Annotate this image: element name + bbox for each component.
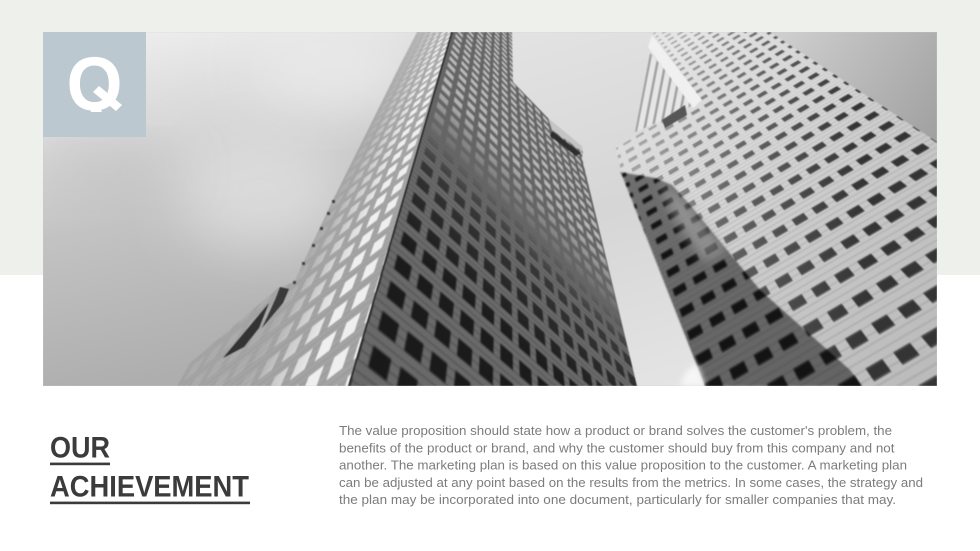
icon box: letter Q [43,32,146,137]
left tower: shaded face [348,32,638,386]
icon box: letter Q: Q [66,42,122,127]
right tower: sunlit face [616,32,937,386]
title: our achievement: ACHIEVEMENT [50,470,249,504]
title: our achievement: OUR [50,432,110,464]
body text paragraph: can be adjusted at any point based on the results from the metrics. In some cases, the strategy and [339,475,923,490]
body text paragraph: The value proposition should state how a product or brand solves the customer's problem, the [339,423,892,438]
body text paragraph: the plan may be incorporated into one document, particularly for smaller companies that may. [339,492,896,507]
body text paragraph: benefits of the product or brand, and why the customer should buy from this company and not [339,440,895,455]
background band [0,0,980,275]
right tower: cast shadow [620,171,862,386]
left tower: lit face [178,32,452,386]
photo: skyscrapers seen from below [43,32,937,386]
body text paragraph: another. The marketing plan is based on this value proposition to the customer. A marketing plan [339,458,907,473]
